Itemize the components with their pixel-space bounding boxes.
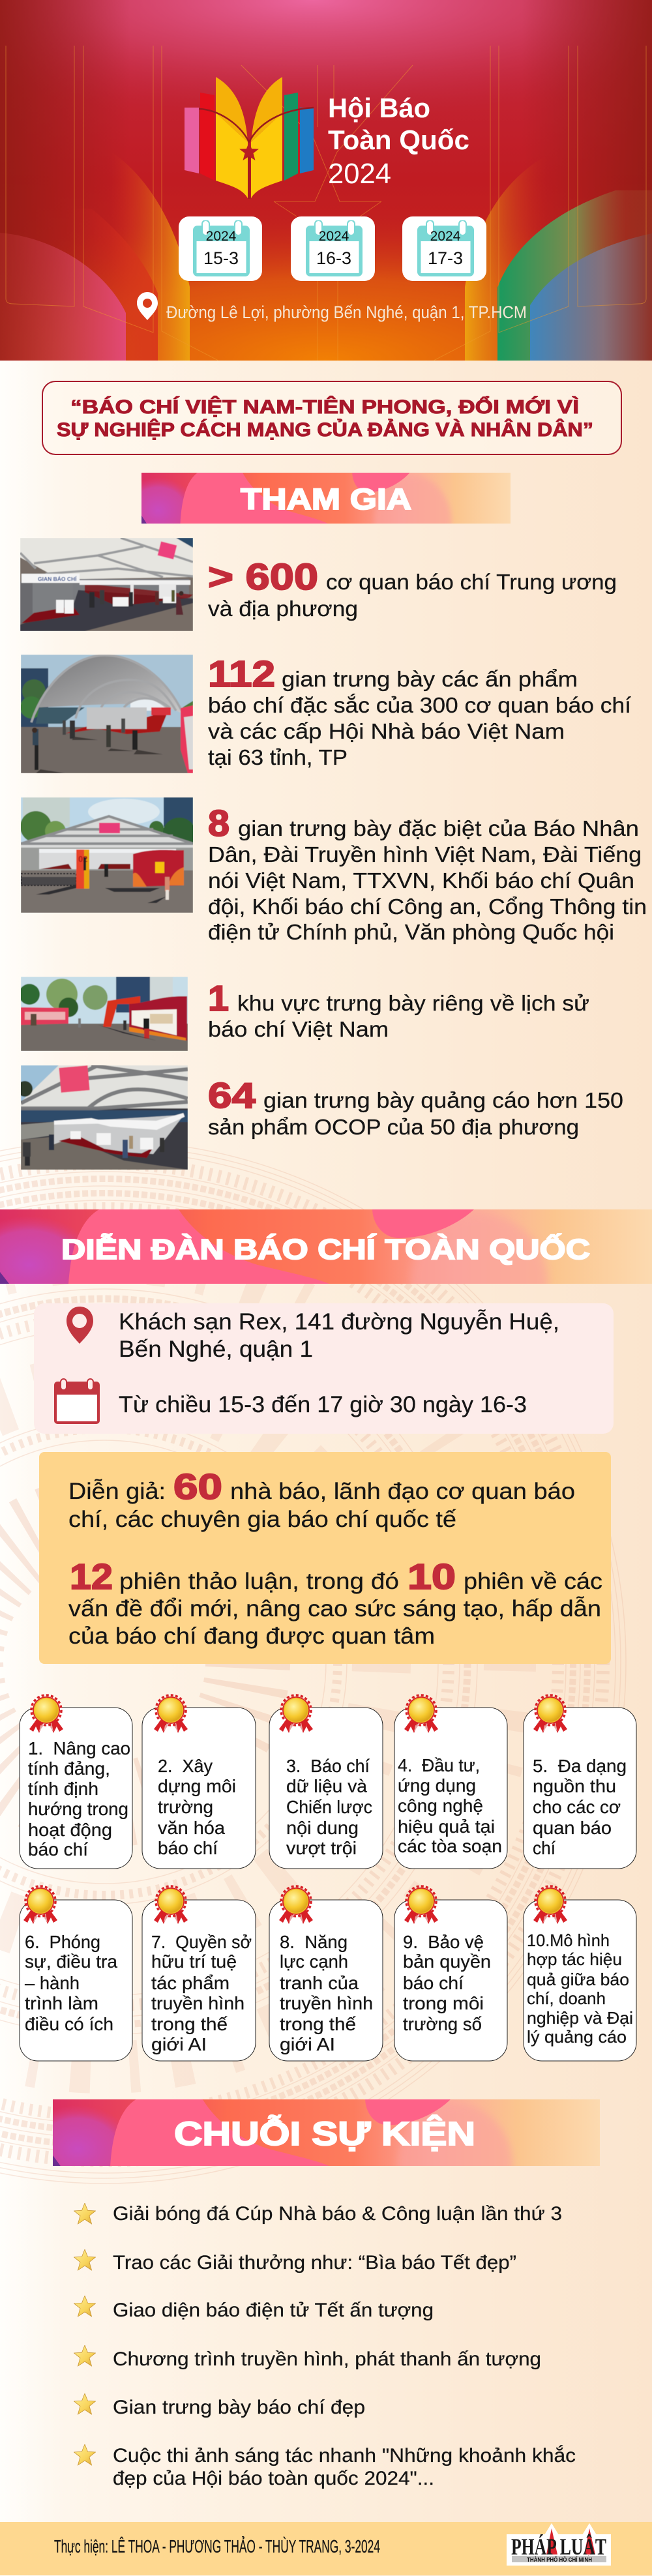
stat: 64 advertising booths: gian trưng bày quảng cáo hơn 150 [263, 1088, 623, 1112]
panel: speakers and sessions: nhà báo, lãnh đạo cơ quan báo [230, 1479, 575, 1504]
event 2: Trao các Giải thưởng như: “Bìa báo Tết đẹp” [113, 2252, 516, 2273]
topic card 4: 4. Đầu tư, [398, 1755, 480, 1775]
panel: speakers and sessions: vấn đề đổi mới, nâng cao sức sáng tạo, hấp dẫn [68, 1596, 601, 1621]
topic card 1: tính đảng, [28, 1758, 110, 1779]
topic card 9 [394, 1886, 507, 2061]
topic card 7: 7. Quyền sở [151, 1932, 252, 1952]
panel: speakers and sessions: Diễn giả: [68, 1479, 166, 1504]
icon: location pin [67, 1307, 93, 1344]
stat: 112 booths: tại 63 tỉnh, TP [208, 745, 348, 769]
topic card 3: dữ liệu và [286, 1776, 368, 1796]
topic card 6: trình làm [25, 1993, 98, 2013]
event title [328, 93, 469, 190]
topic card 10: chí, doanh [527, 1989, 606, 2008]
stat: 112 booths [208, 653, 631, 769]
photo: exhibition booths 1 [20, 538, 193, 631]
topic card 9: trường số [403, 2014, 482, 2034]
venue text [119, 1309, 559, 1362]
panel: speakers and sessions: chí, các chuyên gia báo chí quốc tế [68, 1507, 456, 1532]
panel: speakers and sessions [39, 1452, 611, 1664]
topic card 7 [142, 1886, 256, 2061]
topic card 1: tính định [28, 1779, 98, 1799]
event 1: Giải bóng đá Cúp Nhà báo & Công luận lần thứ 3 [113, 2203, 562, 2225]
topic card 10 [524, 1886, 636, 2061]
stat: 112 booths: gian trưng bày các ấn phẩm [282, 667, 578, 691]
topic card 4: công nghệ [398, 1796, 483, 1816]
date card 17-3: 17-3 [428, 248, 463, 268]
topic card 7: giới AI [151, 2034, 207, 2054]
section banner: tham gia [119, 473, 511, 569]
topic card 6: sự, điều tra [25, 1951, 118, 1972]
topic card 9: báo chí [403, 1973, 464, 1993]
topic card 10: hợp tác hiệu [527, 1949, 622, 1969]
section banner: event series: CHUỖI SỰ KIỆN [174, 2114, 475, 2152]
topic card 1: hướng trong [28, 1799, 128, 1819]
topic card 5: cho các cơ [533, 1797, 621, 1817]
date card 15-3: 2024 [206, 229, 237, 244]
stat: 8 special booths: điện tử Chính phủ, Văn phòng Quốc hội [208, 920, 614, 944]
panel: speakers and sessions: phiên thảo luận, trong đó [119, 1569, 399, 1594]
topic card 5: 5. Đa dạng [533, 1756, 627, 1776]
icon: calendar [54, 1379, 100, 1424]
stat: 600 press agencies [208, 556, 617, 621]
section banner: event series [20, 2099, 600, 2226]
event title: Hội Báo [328, 93, 430, 123]
date card 17-3: 2024 [430, 229, 461, 244]
logo: book [185, 77, 314, 199]
topic card 8: lực cạnh [280, 1951, 348, 1972]
topic card 3: Chiến lược [286, 1797, 372, 1817]
event 6: đẹp của Hội báo toàn quốc 2024"... [113, 2468, 434, 2489]
quote box: SỰ NGHIỆP CÁCH MẠNG CỦA ĐẢNG VÀ NHÂN DÂN” [57, 419, 593, 441]
footer band [0, 2522, 652, 2575]
section banner: national press forum [0, 1209, 652, 1351]
topic card 2 [142, 1695, 256, 1869]
section banner: national press forum: DIỄN ĐÀN BÁO CHÍ TOÀN QUỐC [61, 1232, 590, 1266]
date card 15-3: 15-3 [203, 248, 239, 268]
logo: Pháp Luật: PHÁP LUẬT [511, 2534, 606, 2560]
topic card 1: báo chí [28, 1839, 88, 1859]
panel: forum venue and time [34, 1303, 614, 1434]
photo: press history area [21, 977, 188, 1051]
venue text: Khách sạn Rex, 141 đường Nguyễn Huệ, [119, 1309, 559, 1335]
topic card 1: hoạt động [28, 1820, 112, 1840]
topic card 2: văn hóa [158, 1818, 226, 1838]
stat: 600 press agencies: > 600 [208, 556, 318, 598]
event 4: Chương trình truyền hình, phát thanh ấn tượng [113, 2348, 541, 2370]
topic card 7: hữu trí tuệ [151, 1951, 237, 1972]
stat: 1 history area: báo chí Việt Nam [208, 1017, 389, 1041]
stat: 8 special booths [208, 803, 647, 944]
photo: special booths [21, 797, 193, 913]
topic card 4: các tòa soạn [398, 1836, 502, 1856]
logo: Pháp Luật: THÀNH PHỐ HỒ CHÍ MINH [527, 2556, 592, 2563]
topic card 8: giới AI [280, 2034, 335, 2054]
topic card 8: truyền hình [280, 1993, 373, 2013]
event title: 2024 [328, 158, 391, 190]
stat: 8 special booths: nói Việt Nam, TTXVN, Khối báo chí Quân [208, 868, 634, 893]
stat: 600 press agencies: và địa phương [208, 597, 358, 621]
photo: arched canopy [21, 655, 193, 773]
event 6: Cuộc thi ảnh sáng tác nhanh "Những khoảnh khắc [113, 2445, 576, 2466]
date card 16-3: 2024 [319, 229, 349, 244]
topic card 2: dựng môi [158, 1776, 236, 1796]
stat: 8 special booths: Dân, Đài Truyền hình Việt Nam, Đài Tiếng [208, 842, 642, 866]
topic card 3: nội dung [286, 1818, 359, 1838]
panel: speakers and sessions: 60 [173, 1466, 222, 1507]
topic card 5: nguồn thu [533, 1776, 616, 1796]
topic card 1 [20, 1695, 132, 1869]
topic card 8 [269, 1886, 383, 2061]
photo: special booths: 02 [78, 854, 87, 864]
topic card 6 [20, 1886, 132, 2061]
event title: Toàn Quốc [328, 125, 469, 155]
stat: 112 booths: 112 [208, 653, 275, 695]
credits: Thực hiện: LÊ THOA - PHƯƠNG THẢO - THÙY TRANG, 3-2024 [54, 2536, 380, 2556]
topic card 3: 3. Báo chí [286, 1756, 370, 1776]
quote box: “BÁO CHÍ VIỆT NAM-TIÊN PHONG, ĐỔI MỚI VÌ [70, 396, 579, 418]
event list [74, 2203, 576, 2489]
topic card 9: 9. Bảo vệ [403, 1932, 484, 1952]
topic card 10: 10.Mô hình [527, 1931, 610, 1950]
topic card 9: bản quyền [403, 1951, 491, 1972]
stat: 112 booths: báo chí đặc sắc của 300 cơ quan báo chí [208, 693, 631, 717]
time text: Từ chiều 15-3 đến 17 giờ 30 ngày 16-3 [119, 1392, 527, 1417]
topic card 2: trường [158, 1797, 213, 1817]
logo: Pháp Luật [507, 2523, 611, 2566]
event 5: Gian trưng bày báo chí đẹp [113, 2397, 365, 2418]
stat: 8 special booths: gian trưng bày đặc biệt của Báo Nhân [238, 816, 639, 840]
stat: 64 advertising booths [208, 1075, 623, 1139]
panel: speakers and sessions: 12 [70, 1556, 113, 1597]
topic card 4 [394, 1695, 507, 1869]
topic card 7: tác phẩm [151, 1973, 230, 1993]
topic card 8: 8. Năng [280, 1932, 348, 1952]
topic card 5: quan báo [533, 1818, 612, 1838]
stat: 600 press agencies: cơ quan báo chí Trung ương [326, 570, 617, 594]
topic card 10: quả giữa báo [527, 1970, 629, 1989]
stat: 1 history area: khu vực trưng bày riêng về lịch sử [237, 991, 589, 1015]
icon: location pin [137, 292, 158, 320]
topic card 3 [269, 1695, 383, 1869]
stat: 1 history area [208, 978, 589, 1041]
date card 15-3 [179, 216, 262, 281]
stat: 8 special booths: 8 [208, 803, 230, 844]
quote box [42, 381, 621, 454]
stat: 64 advertising booths: 64 [208, 1075, 256, 1116]
panel: speakers and sessions: 10 [408, 1556, 456, 1597]
topic card 4: ứng dụng [398, 1775, 476, 1796]
location text: Đường Lê Lợi, phường Bến Nghé, quận 1, TP.HCM [166, 303, 527, 322]
section banner: tham gia: THAM GIA [241, 482, 411, 516]
topic card 6: – hành [25, 1973, 80, 1993]
stat: 8 special booths: đội, Khối báo chí Công an, Cổng Thông tin [208, 895, 647, 919]
topic card 2: báo chí [158, 1838, 218, 1858]
event 6 [74, 2444, 576, 2489]
topic card 8: tranh của [280, 1973, 359, 1993]
venue text: Bến Nghé, quận 1 [119, 1337, 313, 1362]
topic card 6: 6. Phóng [25, 1932, 100, 1952]
topic card 1: 1. Nâng cao [28, 1738, 130, 1758]
topic card 5: chí [533, 1838, 556, 1858]
photo: exhibition booths 1: GIAN BÁO CHÍ [38, 576, 77, 582]
stat: 112 booths: và các cấp Hội Nhà báo Việt Nam [208, 719, 565, 743]
panel: speakers and sessions: của báo chí đang được quan tâm [68, 1623, 435, 1649]
topic card 10: nghiệp và Đại [527, 2008, 633, 2028]
date card 16-3 [291, 216, 375, 281]
date card 17-3 [402, 216, 486, 281]
topic card 5 [524, 1695, 636, 1869]
event 3: Giao diện báo điện tử Tết ấn tượng [113, 2300, 434, 2321]
topic card 9: trong môi [403, 1993, 484, 2013]
topic card 7: truyền hình [151, 1993, 244, 2013]
panel: speakers and sessions: phiên về các [464, 1569, 602, 1594]
stat: 1 history area: 1 [208, 978, 229, 1018]
topic card 10: lý quảng cáo [527, 2027, 627, 2047]
topic card 7: trong thế [151, 2014, 228, 2034]
header panel [0, 0, 652, 361]
topic card 6: điều có ích [25, 2014, 113, 2034]
topic card 4: hiệu quả tại [398, 1816, 495, 1837]
photo: OCOP booths [21, 1065, 188, 1170]
topic card 8: trong thế [280, 2014, 356, 2034]
date card 16-3: 16-3 [316, 248, 351, 268]
topic card 3: vượt trội [286, 1838, 357, 1858]
stat: 64 advertising booths: sản phẩm OCOP của 50 địa phương [208, 1115, 579, 1139]
topic card 2: 2. Xây [158, 1756, 213, 1776]
